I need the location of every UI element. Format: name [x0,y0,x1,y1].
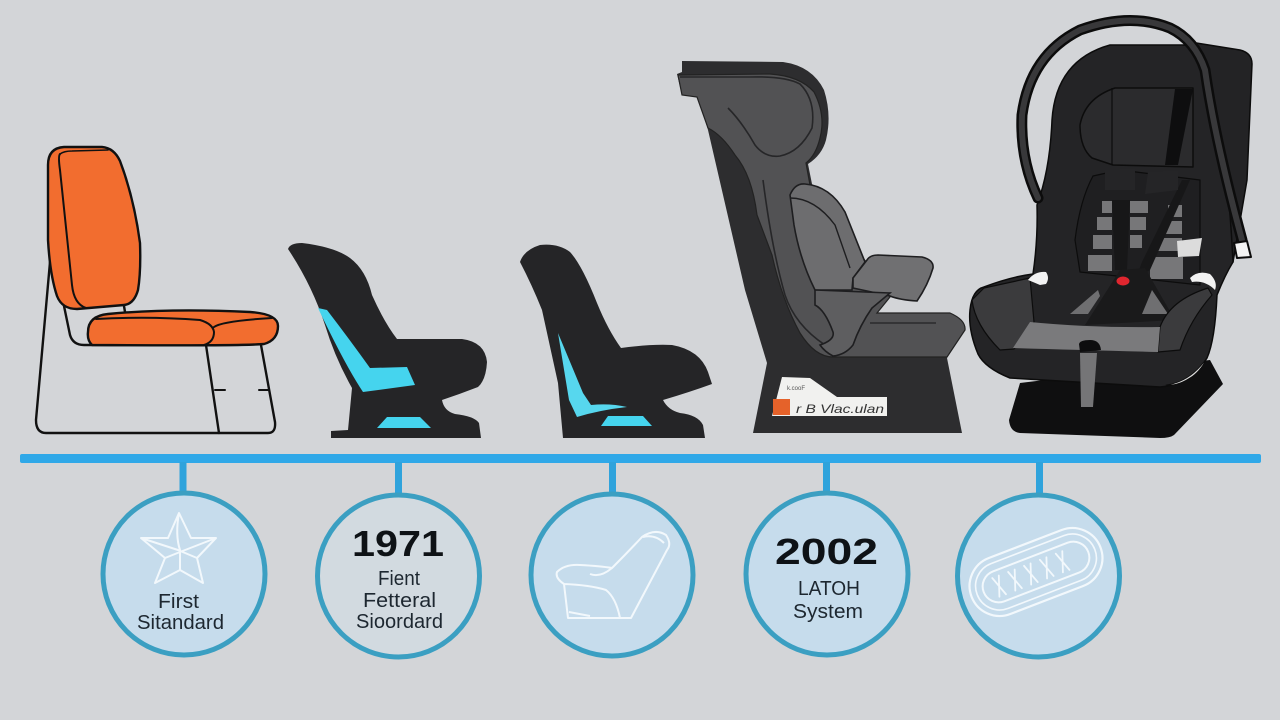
seat 4 back cushion [790,184,865,290]
year: 2002: 2002 [775,531,878,572]
seat 1: orange bench seat [36,147,278,433]
icon: star [141,513,216,583]
seat 5 lower harness grey [1070,290,1100,314]
seat 5 front band [1013,322,1160,352]
seat 4: tall grey booster seat [677,61,965,433]
label: latch system: LATOH [798,578,860,600]
timeline bar [20,454,1261,463]
seat 4 sticker label: k.cooF [787,386,805,392]
seat 5 harness padding [1075,170,1200,285]
seat 5 base edge highlight [1166,358,1207,385]
seat 5 lap strap [1080,353,1097,407]
seat 4 headrest line [680,77,813,156]
label: first standard [137,591,224,634]
seat 5 grey slats [1088,201,1183,279]
milestone 1: first standard [103,462,265,655]
icon: latch connector [961,519,1111,625]
label: federal standard: Fient [378,568,420,590]
milestone 2: 1971 federal standard [318,462,480,657]
seat 3 cyan base panel [601,416,652,426]
seat 4 grey shell [678,74,965,357]
seat 2: black seat with cyan panels [288,243,487,438]
label: latch system: System [793,601,863,623]
seat 3: black seat with thin cyan panels [520,245,712,438]
milestone 5: latch connector icon [958,462,1120,657]
label: federal standard: Sioordard [356,611,443,633]
seat 2 cyan base panel [377,417,431,428]
seat 4 armrest [853,255,933,301]
seat 5 right wing [1158,288,1212,352]
label: first standard: First [158,591,199,613]
seat 4 sticker label [772,377,887,416]
label: latch system [793,578,863,623]
seat 2 cyan side panel [318,308,415,392]
label: first standard: Sitandard [137,612,224,634]
seat 5 red buckle [1116,276,1130,286]
seat 5: modern infant seat with handle [970,20,1252,438]
seat 5 shell [970,45,1233,387]
milestone 4: 2002 latch system [746,462,908,655]
label: federal standard: Fetteral [363,590,436,612]
seat 5 handle tip [1234,241,1251,258]
seat 5 carry handle [1022,20,1242,240]
seat 4 sticker label: r B Vlac.ulan [796,402,884,416]
seat 5 left wing [972,278,1034,350]
seat 5 base [1009,360,1223,438]
label: federal standard [356,568,443,633]
seat 3 cyan panel [558,333,627,417]
seat 4 seat cushion [815,290,890,356]
seat 5 harness straps [1112,200,1130,270]
year: 1971: 1971 [352,523,444,564]
seat 5 headrest [1080,88,1193,167]
milestone 3: seat icon [531,462,693,656]
seat 5 white cuffs and label [1028,238,1216,290]
seat 5 canopy [1180,42,1252,262]
icon: seat outline [557,532,669,618]
